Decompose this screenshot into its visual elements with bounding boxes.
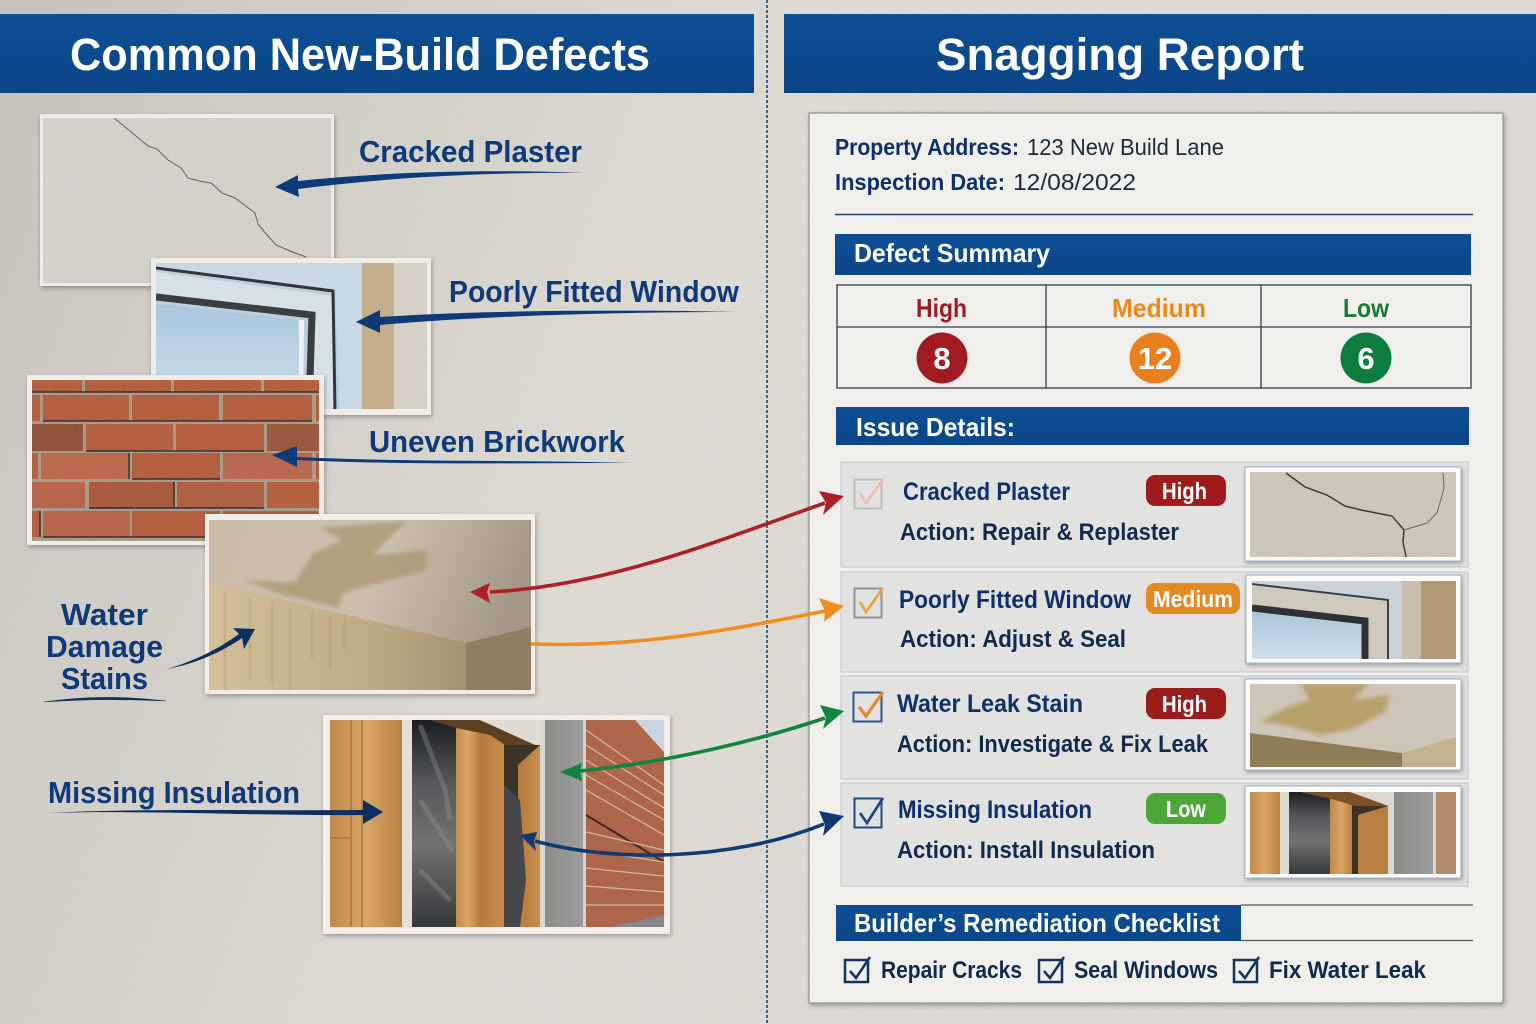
issue: Poorly Fitted Window xyxy=(841,572,1468,672)
photo: uneven brickwork xyxy=(27,375,324,545)
section heading: Builder's Remediation Checklist xyxy=(836,905,1473,941)
issue: Missing Insulation: Missing Insulation xyxy=(898,796,1092,824)
photo: water damage stains xyxy=(205,514,535,694)
issue: Missing Insulation: Low xyxy=(1166,796,1206,822)
heading banner: Common New-Build Defects: Common New-Build Defects xyxy=(70,29,650,80)
issue: Cracked Plaster: Cracked Plaster xyxy=(903,478,1070,506)
issue: Water Leak Stain xyxy=(841,676,1468,779)
arrow: red link xyxy=(470,491,844,603)
issue: Missing Insulation xyxy=(841,783,1468,886)
arrow: uneven brickwork xyxy=(272,446,631,467)
label: Water Damage Stains: Damage xyxy=(46,629,163,664)
checklist: Seal Windows: Seal Windows xyxy=(1074,957,1218,984)
issue: Cracked Plaster: Action: Repair & Replaster xyxy=(900,519,1179,546)
arrow: green link xyxy=(560,705,844,781)
property details: 12/08/2022 xyxy=(1013,169,1136,195)
issue: Water Leak Stain: High xyxy=(1162,691,1207,717)
arrow: missing insulation xyxy=(47,800,383,824)
section heading: Defect Summary: Defect Summary xyxy=(854,238,1051,268)
issue: Cracked Plaster: High xyxy=(1162,478,1207,504)
section heading: Defect Summary xyxy=(835,234,1471,275)
photo: cracked plaster xyxy=(40,114,334,286)
heading banner: Snagging Report xyxy=(784,14,1536,93)
issue: Water Leak Stain: Water Leak Stain xyxy=(897,690,1083,718)
issue: Poorly Fitted Window: Poorly Fitted Window xyxy=(899,586,1132,614)
label: Missing Insulation: Missing Insulation xyxy=(48,775,300,810)
heading banner: Common New-Build Defects xyxy=(0,14,754,93)
issue: Poorly Fitted Window: Action: Adjust & Seal xyxy=(900,626,1126,653)
section heading: Issue Details: Issue Details: xyxy=(856,412,1015,442)
heading banner: Snagging Report: Snagging Report xyxy=(936,29,1304,80)
label: Uneven Brickwork: Uneven Brickwork xyxy=(369,424,626,459)
defect summary table xyxy=(837,285,1471,388)
issue: Cracked Plaster xyxy=(841,462,1468,567)
section heading: Builder's Remediation Checklist: Builder’s Remediation Checklist xyxy=(854,908,1220,938)
label: Water Damage Stains xyxy=(44,597,166,702)
issue: Poorly Fitted Window: Medium xyxy=(1153,586,1233,612)
issue: Missing Insulation: Action: Install Insulation xyxy=(897,837,1155,864)
checklist: Repair Cracks: Repair Cracks xyxy=(881,957,1022,984)
arrow: navy link xyxy=(520,811,844,855)
arrow: cracked plaster xyxy=(275,171,585,197)
property details: Inspection Date: xyxy=(835,169,1005,195)
defect summary table: Low xyxy=(1343,293,1390,323)
label: Water Damage Stains: Water xyxy=(61,597,148,632)
arrow: water damage xyxy=(167,628,255,669)
arrow: poorly fitted window xyxy=(356,310,737,333)
section heading: Issue Details xyxy=(836,407,1469,445)
defect summary table: High xyxy=(916,293,967,323)
property details: 123 New Build Lane xyxy=(1027,134,1224,160)
label: Poorly Fitted Window: Poorly Fitted Window xyxy=(449,274,740,309)
defect summary table: 12 xyxy=(1138,341,1172,376)
photo: poorly fitted window xyxy=(151,258,431,415)
property details xyxy=(835,134,1473,214)
checklist: Fix Water Leak: Fix Water Leak xyxy=(1269,957,1427,984)
label: Cracked Plaster: Cracked Plaster xyxy=(359,134,582,169)
panel: snagging report xyxy=(809,113,1503,1003)
defect summary table: Medium xyxy=(1112,293,1206,323)
property details: Property Address: xyxy=(835,134,1019,160)
arrow: orange link xyxy=(531,598,844,645)
defect summary table: 6 xyxy=(1357,341,1375,376)
defect summary table: 8 xyxy=(933,341,951,376)
photo: missing insulation xyxy=(323,715,670,934)
issue: Water Leak Stain: Action: Investigate & Fix Leak xyxy=(897,731,1209,758)
label: Water Damage Stains: Stains xyxy=(61,661,148,696)
